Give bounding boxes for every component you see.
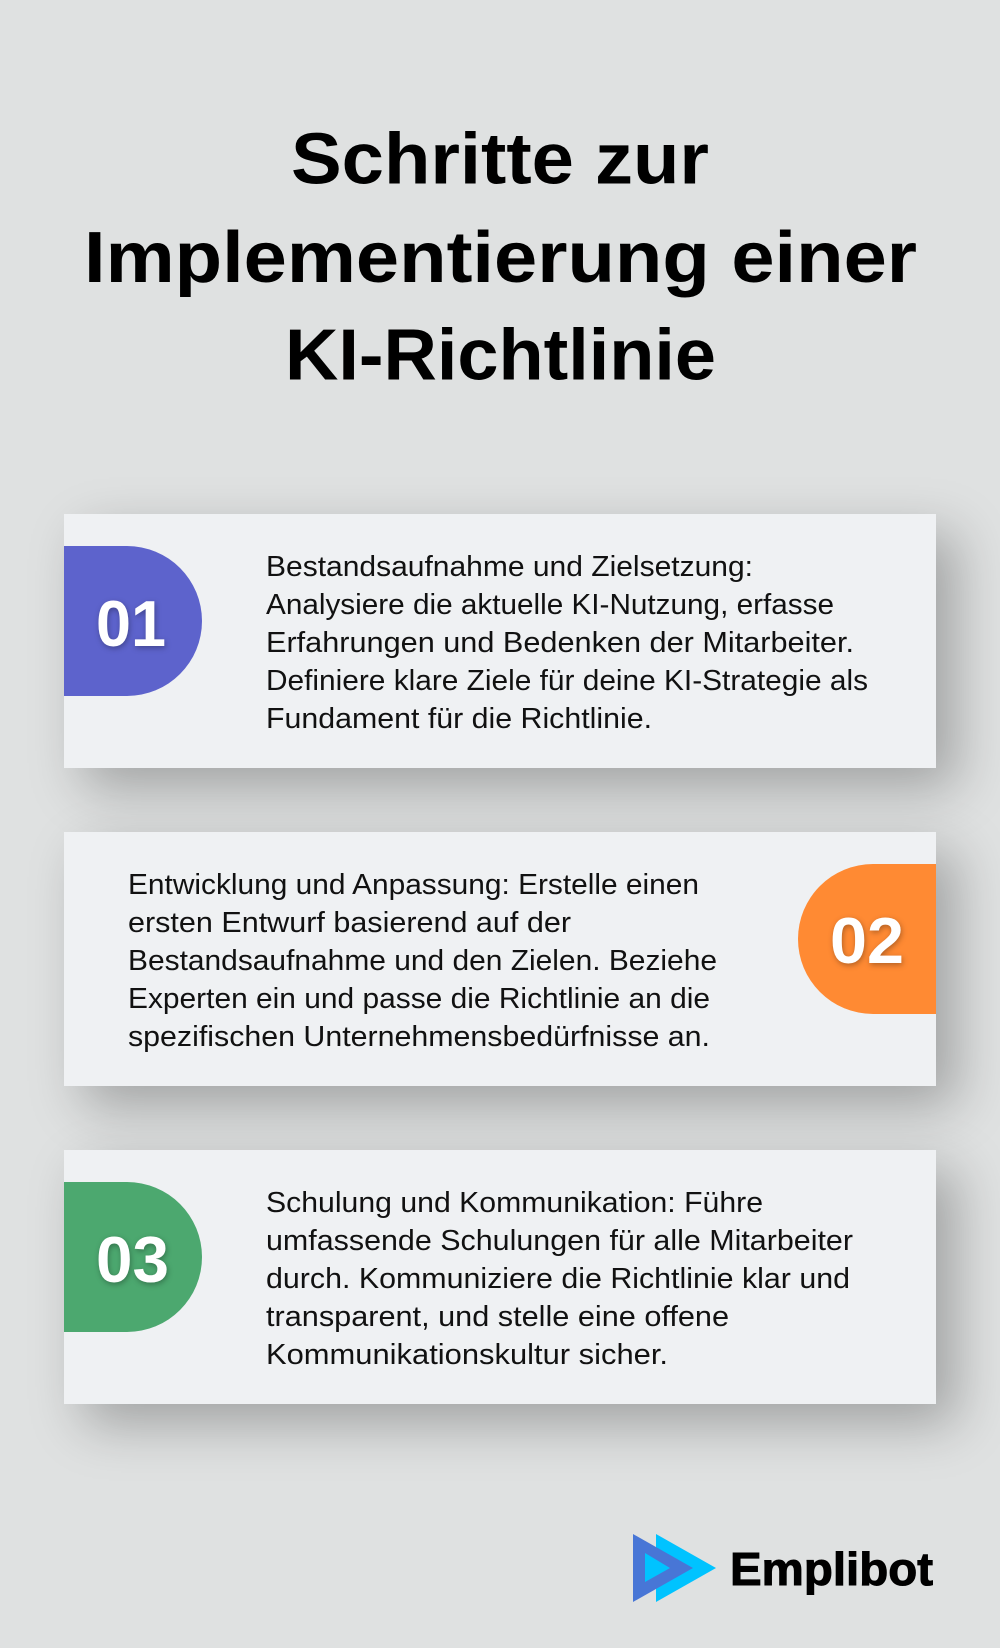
wordmark: Emplibot [730, 1543, 933, 1595]
text: step 1 description: Bestandsaufnahme und Zielsetzung: [266, 551, 753, 583]
text: step 3 description: transparent, und stelle eine offene [266, 1301, 729, 1333]
title: Schritte zur [291, 120, 709, 200]
panel: step 2 [64, 832, 936, 1086]
text: step 3 description [266, 1187, 854, 1371]
badge: 03: 03 [96, 1223, 169, 1296]
badge: 01 [64, 546, 202, 696]
badge: 01: 01 [96, 587, 166, 660]
text: step 3 description: Schulung und Kommunikation: Führe [266, 1187, 763, 1219]
icon: play triangles [633, 1534, 716, 1602]
panel: step 3 [64, 1150, 936, 1404]
text: step 3 description: umfassende Schulungen für alle Mitarbeiter [266, 1225, 854, 1257]
badge: 02 [798, 864, 936, 1014]
text: step 2 description: Entwicklung und Anpassung: Erstelle einen [128, 869, 699, 901]
text: step 1 description: Erfahrungen und Bedenken der Mitarbeiter. [266, 627, 854, 659]
text: step 2 description [128, 869, 717, 1053]
title: KI-Richtlinie [285, 316, 716, 396]
text: step 1 description: Definiere klare Ziele für deine KI-Strategie als [266, 665, 868, 697]
text: step 2 description: ersten Entwurf basierend auf der [128, 907, 572, 939]
badge: 03 [64, 1182, 202, 1332]
panel: step 1 [64, 514, 936, 768]
text: step 3 description: durch. Kommuniziere die Richtlinie klar und [266, 1263, 850, 1295]
title [84, 120, 917, 396]
badge: 02: 02 [830, 904, 904, 977]
text: step 1 description [266, 551, 868, 735]
text: step 1 description: Fundament für die Richtlinie. [266, 703, 652, 735]
text: step 1 description: Analysiere die aktuelle KI-Nutzung, erfasse [266, 589, 834, 621]
title: Implementierung einer [84, 218, 917, 298]
text: step 3 description: Kommunikationskultur sicher. [266, 1339, 668, 1371]
text: step 2 description: Bestandsaufnahme und den Zielen. Beziehe [128, 945, 717, 977]
logo: Emplibot [633, 1534, 933, 1602]
text: step 2 description: Experten ein und passe die Richtlinie an die [128, 983, 710, 1015]
text: step 2 description: spezifischen Unternehmensbedürfnisse an. [128, 1021, 710, 1053]
